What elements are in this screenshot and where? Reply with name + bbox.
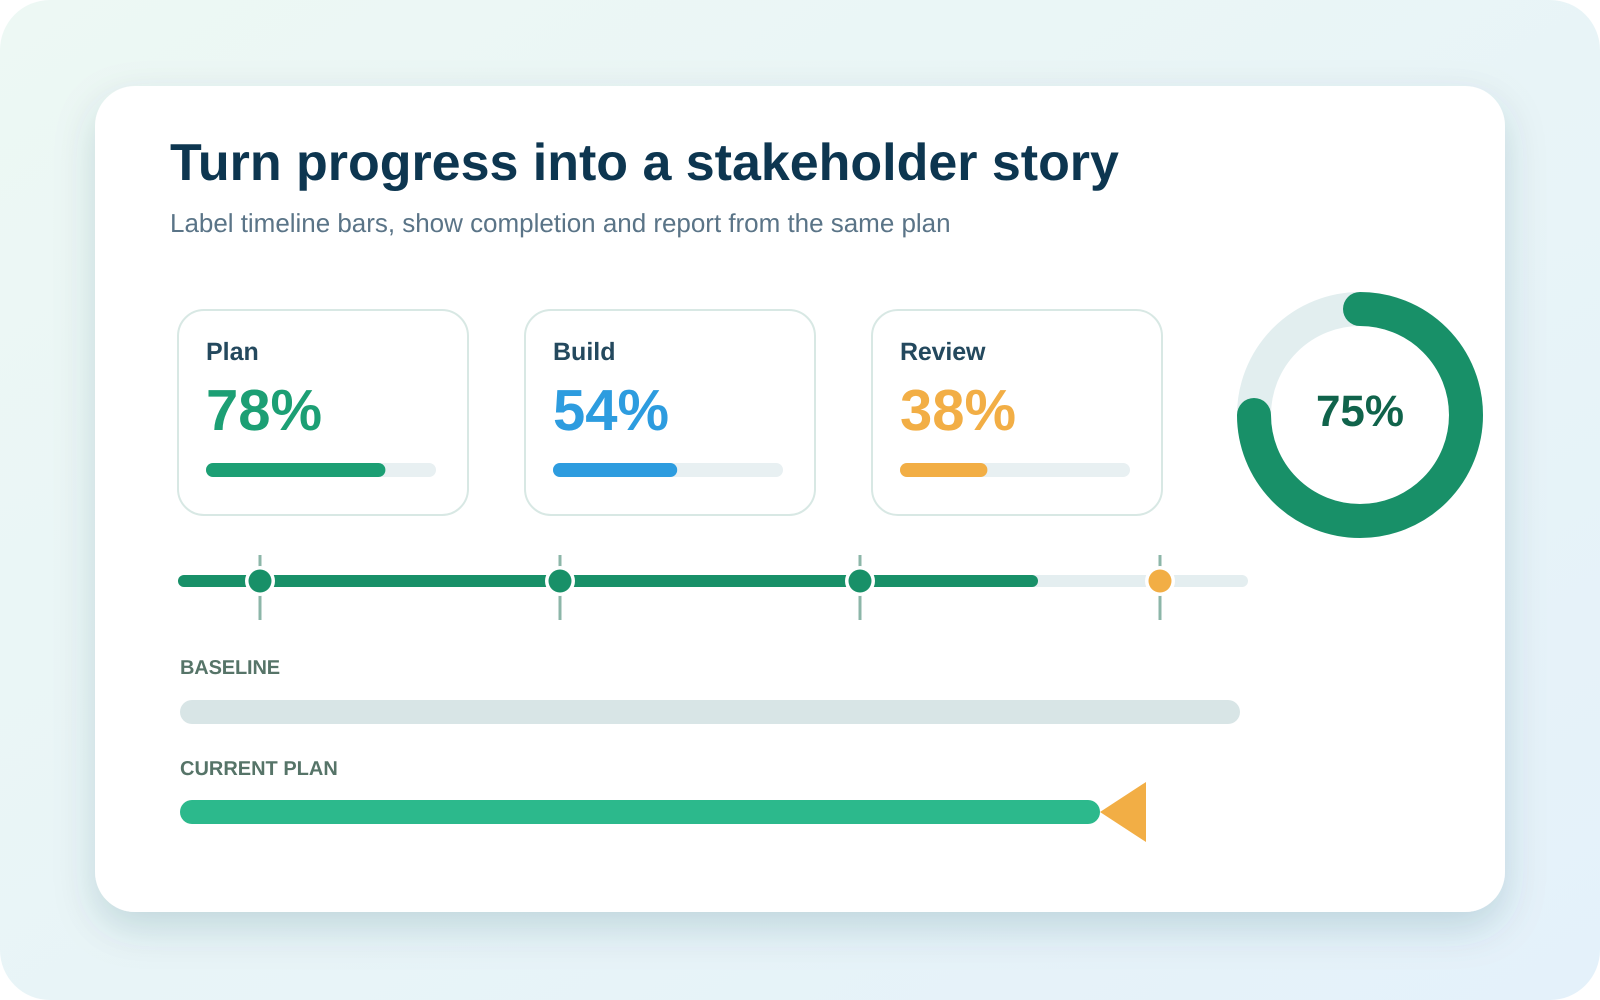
main card xyxy=(95,86,1505,912)
progress bar: Plan xyxy=(206,463,436,477)
milestone 3 xyxy=(845,555,875,620)
progress bar: Build xyxy=(553,463,783,477)
current plan bar xyxy=(180,800,1100,824)
panel: Plan xyxy=(178,310,468,515)
value: 38%: 38% xyxy=(900,378,1016,443)
label: Plan: Plan xyxy=(206,338,259,366)
panel: Review xyxy=(872,310,1162,515)
current plan label: CURRENT PLAN xyxy=(180,758,338,780)
subtitle: Label timeline bars, show completion and report from the same plan xyxy=(170,208,951,238)
milestone 1 xyxy=(245,555,275,620)
baseline bar xyxy=(180,700,1240,724)
progress bar: Review xyxy=(900,463,1130,477)
timeline xyxy=(178,555,1248,620)
arrow marker xyxy=(1100,782,1146,842)
donut chart: 75% xyxy=(1254,309,1466,521)
panel: Build xyxy=(525,310,815,515)
donut value: 75% xyxy=(1316,387,1404,436)
milestone 2 xyxy=(545,555,575,620)
title: Turn progress into a stakeholder story xyxy=(170,134,1119,192)
value: 78%: 78% xyxy=(206,378,322,443)
value: 54%: 54% xyxy=(553,378,669,443)
baseline label: BASELINE xyxy=(180,657,280,679)
milestone 4 xyxy=(1145,555,1175,620)
label: Review: Review xyxy=(900,338,986,366)
label: Build: Build xyxy=(553,338,616,366)
